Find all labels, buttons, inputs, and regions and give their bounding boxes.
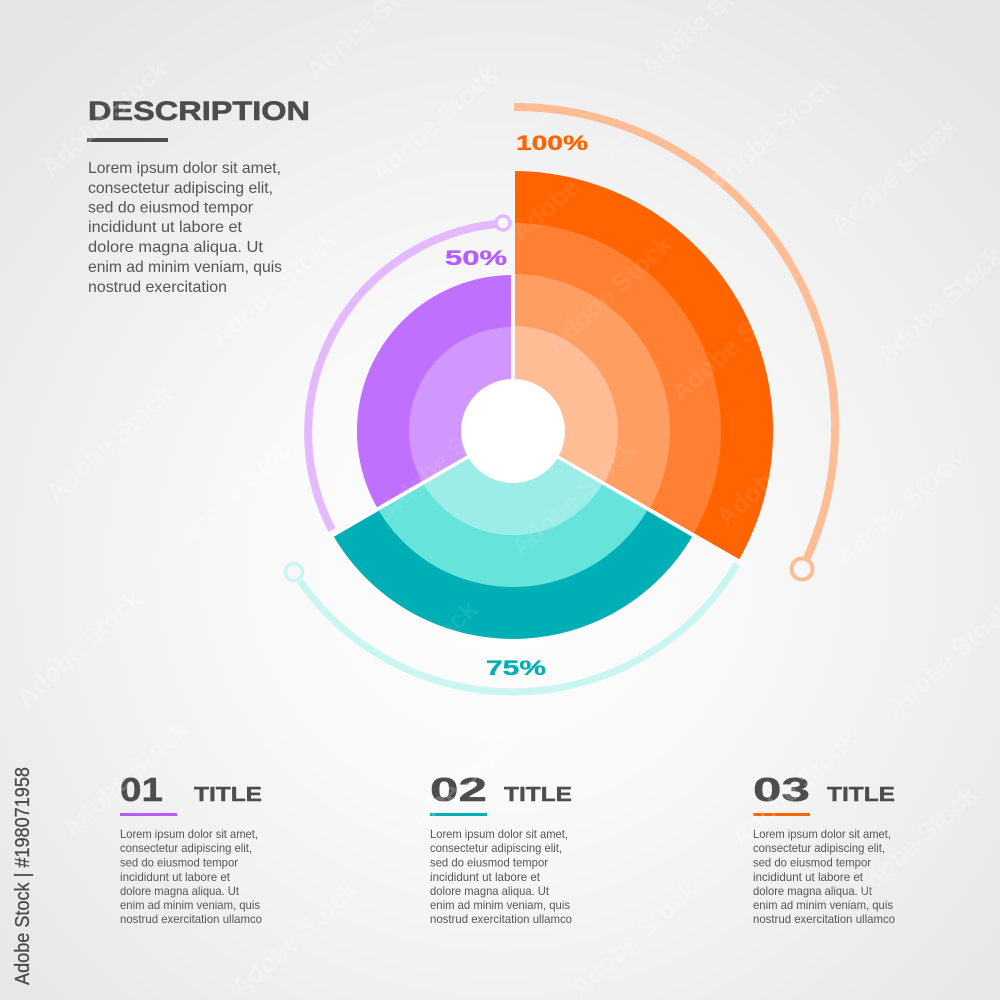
description text [88,160,282,296]
description text: consectetur adipiscing elit, [88,180,273,197]
orange sector 100% [515,171,773,559]
purple sector 50% [357,275,511,507]
watermark pattern: over chart: Adobe Stock [665,279,803,408]
stock id side label: Adobe Stock | #198071958 [12,767,34,985]
watermark pattern: background: Adobe Stock [845,779,983,908]
description text: enim ad minim veniam, quis [88,259,282,276]
text 01: enim ad minim veniam, quis [120,898,260,912]
title 01: TITLE [194,784,262,806]
watermark pattern: background: Adobe Stock [225,874,363,1000]
description text: Lorem ipsum dolor sit amet, [88,160,281,177]
text 03: sed do eiusmod tempor [753,856,871,870]
rule 01 [120,813,177,816]
centre hole [461,379,565,483]
watermark pattern: background: Adobe Stock [40,379,178,508]
watermark pattern: background: Adobe Stock [565,874,703,1000]
text 03: enim ad minim veniam, quis [753,898,893,912]
text 02: nostrud exercitation ullamco [430,912,572,926]
watermark pattern: over chart: Adobe Stock [505,434,643,563]
watermark pattern: background: Adobe Stock [205,224,343,353]
watermark pattern: background: Adobe Stock [55,714,193,843]
rule 02 [430,813,487,816]
text 02: dolore magna aliqua. Ut [430,884,550,898]
text 02: incididunt ut labore et [430,870,541,884]
watermark pattern: background: Adobe Stock [170,424,308,553]
arc: teal 75% [286,564,737,692]
description rule [87,138,168,142]
arc: orange 100% [514,107,835,580]
text 02 [430,827,572,926]
text 01: nostrud exercitation ullamco [120,912,262,926]
watermark pattern: background: Adobe Stock [825,111,963,240]
title 03: TITLE [827,784,895,806]
text 03: Lorem ipsum dolor sit amet, [753,827,891,841]
rule 03 [753,813,810,816]
watermark pattern: over chart: Adobe Stock [675,604,813,733]
text 02: sed do eiusmod tempor [430,856,548,870]
description text: nostrud exercitation [88,279,227,296]
watermark pattern: over chart: Adobe Stock [540,229,678,358]
description text: dolore magna aliqua. Ut [88,239,264,256]
text 01: consectetur adipiscing elit, [120,841,252,855]
teal sector 75% [334,433,692,639]
watermark pattern: over chart: Adobe Stock [345,594,483,723]
watermark pattern: background: Adobe Stock [725,724,863,853]
label 100%: 100% [516,132,588,155]
watermark pattern: over chart: Adobe Stock [375,394,513,523]
number 02: 02 [430,771,487,808]
watermark pattern: over chart [210,119,848,733]
text 01: dolore magna aliqua. Ut [120,884,240,898]
text 02: enim ad minim veniam, quis [430,898,570,912]
text 01 [120,827,262,926]
text 02: Lorem ipsum dolor sit amet, [430,827,568,841]
text 02: consectetur adipiscing elit, [430,841,562,855]
panel: description [87,96,310,296]
watermark pattern: over chart: Adobe Stock [710,404,848,533]
description text: incididunt ut labore et [88,219,243,236]
watermark pattern: background: Adobe Stock [385,724,523,853]
text 03: nostrud exercitation ullamco [753,912,895,926]
number 01: 01 [120,771,163,808]
panel: item 01 [120,771,262,926]
panel: item 02 [430,771,572,926]
watermark pattern: background: Adobe Stock [703,69,841,198]
watermark pattern: background: Adobe Stock [10,584,148,713]
title 02: TITLE [504,784,572,806]
text 03: incididunt ut labore et [753,870,864,884]
arc: purple 50% [308,216,510,530]
text 03: dolore magna aliqua. Ut [753,884,873,898]
label 75%: 75% [486,657,546,680]
panel: item 03 [753,771,895,926]
description heading: DESCRIPTION [88,96,310,126]
text 01: sed do eiusmod tempor [120,856,238,870]
label 50%: 50% [445,247,507,270]
watermark pattern: background: Adobe Stock [365,59,503,188]
text 03: consectetur adipiscing elit, [753,841,885,855]
text 01: Lorem ipsum dolor sit amet, [120,827,258,841]
description text: sed do eiusmod tempor [88,200,254,216]
watermark pattern: background: Adobe Stock [35,54,173,183]
text 01: incididunt ut labore et [120,870,231,884]
watermark pattern: over chart: Adobe Stock [505,119,643,248]
text 03 [753,827,895,926]
watermark pattern: over chart: Adobe Stock [210,549,348,678]
watermark pattern: background: Adobe Stock [830,444,968,573]
chart: radial pie [334,171,773,639]
number 03: 03 [753,771,810,808]
